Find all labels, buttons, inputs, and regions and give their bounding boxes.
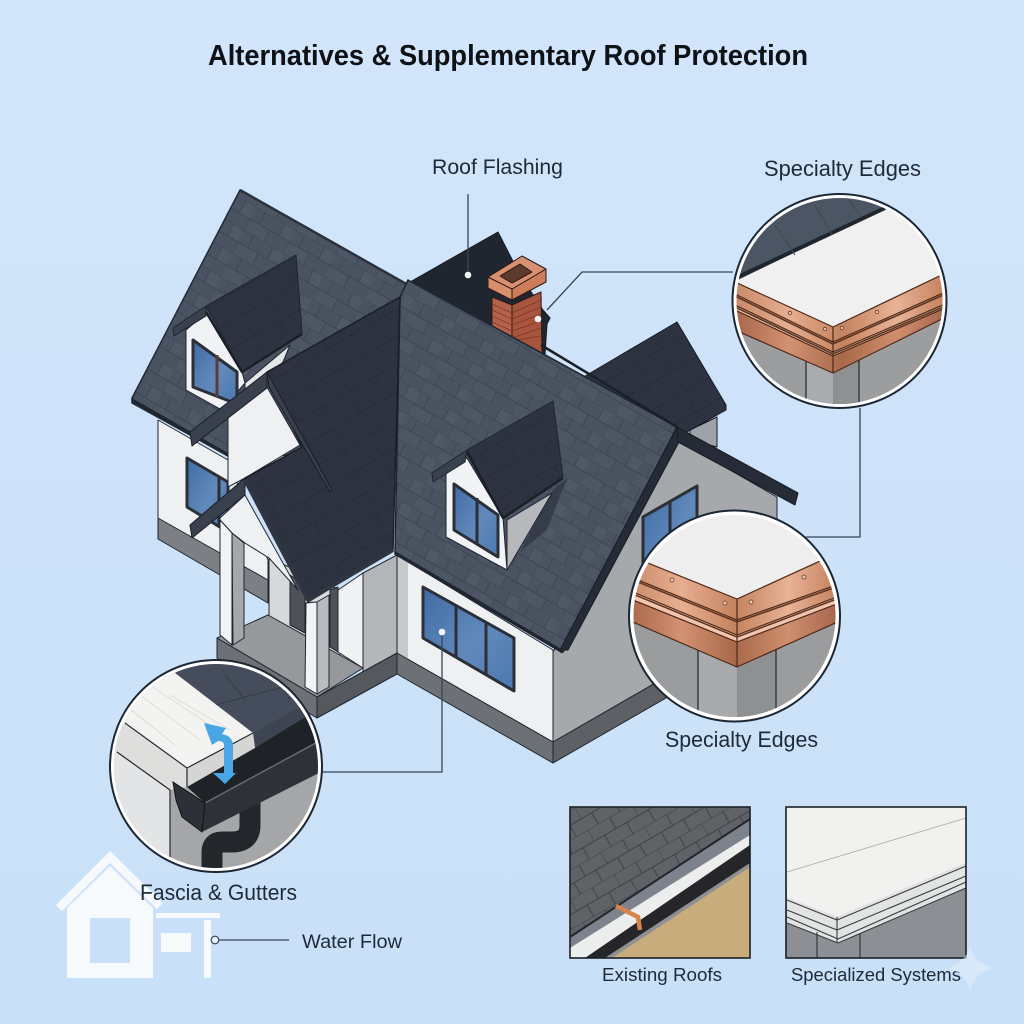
right rake — [560, 427, 798, 650]
marker dots — [439, 272, 541, 635]
label: specialized systems: Specialized Systems — [791, 964, 961, 985]
legend: water flow — [211, 932, 402, 953]
left wall — [158, 420, 268, 603]
back left roof — [132, 190, 408, 456]
icon: faint sparkle — [948, 945, 992, 992]
label: specialty edges top: Specialty Edges — [764, 156, 921, 181]
main roof — [395, 280, 677, 652]
house illustration — [132, 190, 798, 763]
panel: specialized systems — [786, 807, 966, 958]
label: roof flashing: Roof Flashing — [432, 156, 563, 179]
icon: water flow arrow — [204, 723, 236, 784]
upper gable wall — [228, 387, 300, 487]
back top roof — [410, 232, 550, 355]
left dormer — [173, 255, 302, 410]
gable rakes — [190, 372, 332, 538]
chimney — [488, 256, 546, 354]
lower gable wall — [220, 495, 298, 590]
detail circle: specialty edges top — [730, 190, 950, 420]
back right roof — [575, 322, 726, 447]
main eave — [395, 553, 563, 652]
right side wall — [553, 440, 777, 763]
title: Alternatives & Supplementary Roof Protection — [208, 40, 808, 72]
label: specialty edges bottom: Specialty Edges — [665, 727, 818, 752]
detail circle: fascia and gutters — [108, 658, 325, 880]
label: existing roofs: Existing Roofs — [602, 964, 722, 985]
ridge line — [541, 345, 677, 427]
panel: existing roofs — [570, 807, 750, 958]
main dormer — [432, 401, 567, 570]
porch — [217, 555, 397, 718]
icon: faint house — [56, 851, 220, 978]
main front wall — [397, 555, 553, 763]
callout lines — [322, 194, 860, 772]
legend: water flow: Water Flow — [302, 932, 402, 953]
detail circle: specialty edges bottom — [628, 510, 842, 724]
front dark roof — [245, 297, 400, 602]
porch pillars — [220, 520, 329, 694]
label: fascia and gutters: Fascia & Gutters — [140, 880, 297, 905]
gable rake and eave — [245, 480, 393, 600]
